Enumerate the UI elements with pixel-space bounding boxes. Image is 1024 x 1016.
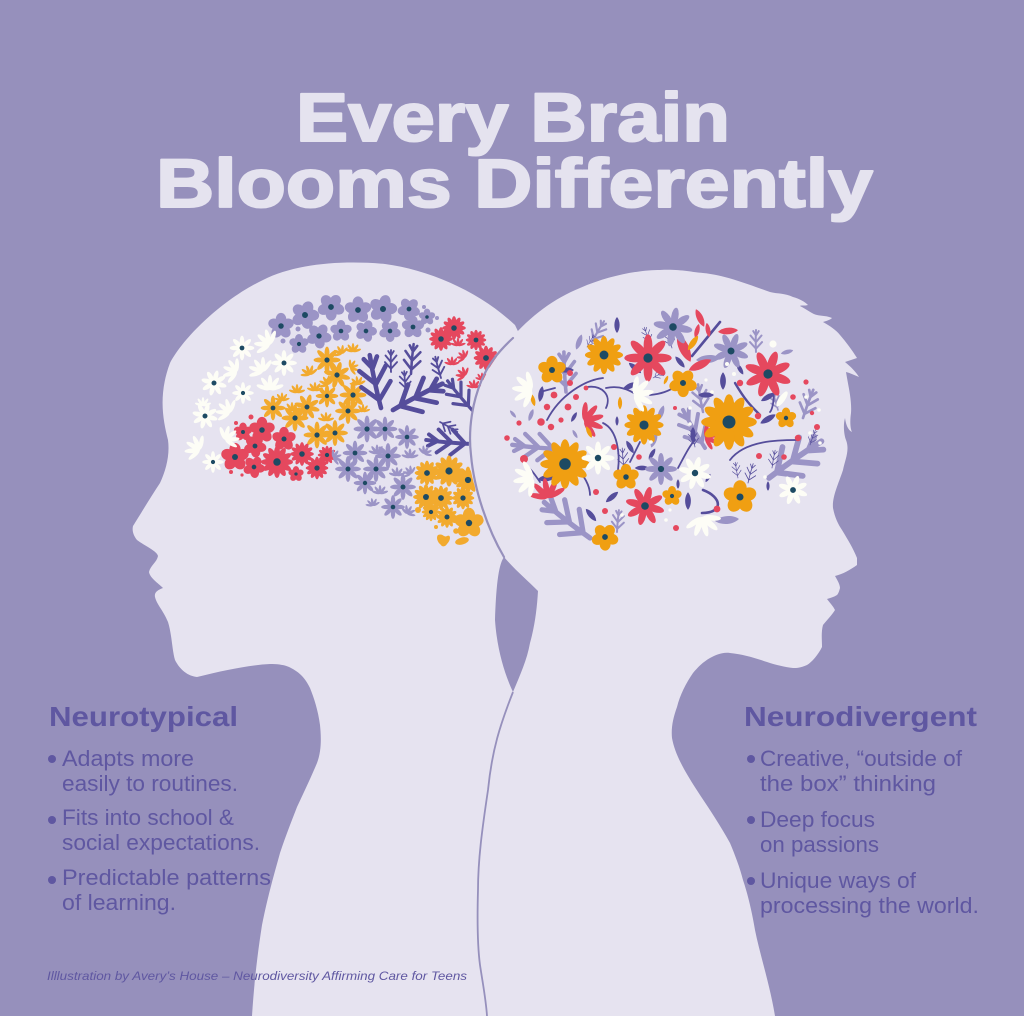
- flowers: yellow leaves: [529, 334, 700, 439]
- flowers: lavender lower cluster: [329, 416, 435, 519]
- bullet: deep focus: on passions: [760, 832, 879, 857]
- bullet: adapts: easily to routines.: [62, 771, 238, 796]
- title: [156, 79, 873, 222]
- flowers: lavender sprigs: [511, 318, 832, 551]
- flowers: lavender leaves: [509, 334, 794, 525]
- bullet: fits in: [48, 805, 260, 855]
- left brain flowers: [179, 287, 498, 546]
- bullet: adapts: Adapts more: [62, 746, 194, 771]
- bullet: predictable: of learning.: [62, 890, 176, 915]
- title: Blooms Differently: [156, 145, 873, 222]
- bullet: unique ways: Unique ways of: [760, 868, 917, 893]
- flowers: white cluster: [179, 323, 297, 473]
- flowers: stems: [524, 322, 797, 513]
- flowers: yellow lower right cluster: [413, 456, 485, 546]
- silhouette: left head (neurotypical): [133, 263, 560, 1016]
- bullet: creative: the box” thinking: [760, 771, 936, 796]
- silhouette: right head (neurodivergent): [469, 270, 859, 1016]
- bullet: creative: Creative, “outside of: [760, 746, 963, 771]
- flowers: small twigs: [584, 326, 820, 484]
- flowers: red cluster right: [429, 316, 498, 389]
- column: neurodivergent: [744, 701, 979, 918]
- flowers: dark purple branches: [355, 343, 480, 457]
- bullet: deep focus: [747, 807, 879, 857]
- outline: right head arc: [470, 338, 513, 557]
- flowers: yellow large: [537, 336, 797, 557]
- bullet: predictable: [48, 865, 271, 915]
- bullet: creative: [747, 746, 963, 796]
- column: neurotypical: [48, 701, 271, 915]
- flowers: white: [510, 340, 822, 541]
- outline: body divider line: [478, 692, 513, 1016]
- title: Every Brain: [296, 79, 730, 156]
- right brain flowers: [504, 304, 832, 557]
- heading: neurodivergent: Neurodivergent: [744, 701, 977, 732]
- flowers: red petals: [504, 308, 820, 531]
- flowers: red large: [621, 334, 798, 530]
- bullet: fits in: social expectations.: [62, 830, 260, 855]
- heading: neurotypical: Neurotypical: [49, 701, 238, 732]
- bullet: fits in: Fits into school &: [62, 805, 234, 830]
- bullet: unique ways: processing the world.: [760, 893, 979, 918]
- credit line: Illlustration by Avery’s House – Neurodiversity Affirming Care for Teens: [47, 969, 467, 983]
- bullet: unique ways: [747, 868, 979, 918]
- bullet: adapts: [48, 746, 238, 796]
- flowers: yellow cluster: [261, 342, 371, 448]
- flowers: dark leaves: [537, 317, 777, 523]
- flowers: lavender top cluster: [267, 287, 439, 354]
- bullet: predictable: Predictable patterns: [62, 865, 271, 890]
- flowers: lavender large: [645, 304, 754, 485]
- flowers: red cluster left: [220, 414, 336, 483]
- bullet: deep focus: Deep focus: [760, 807, 875, 832]
